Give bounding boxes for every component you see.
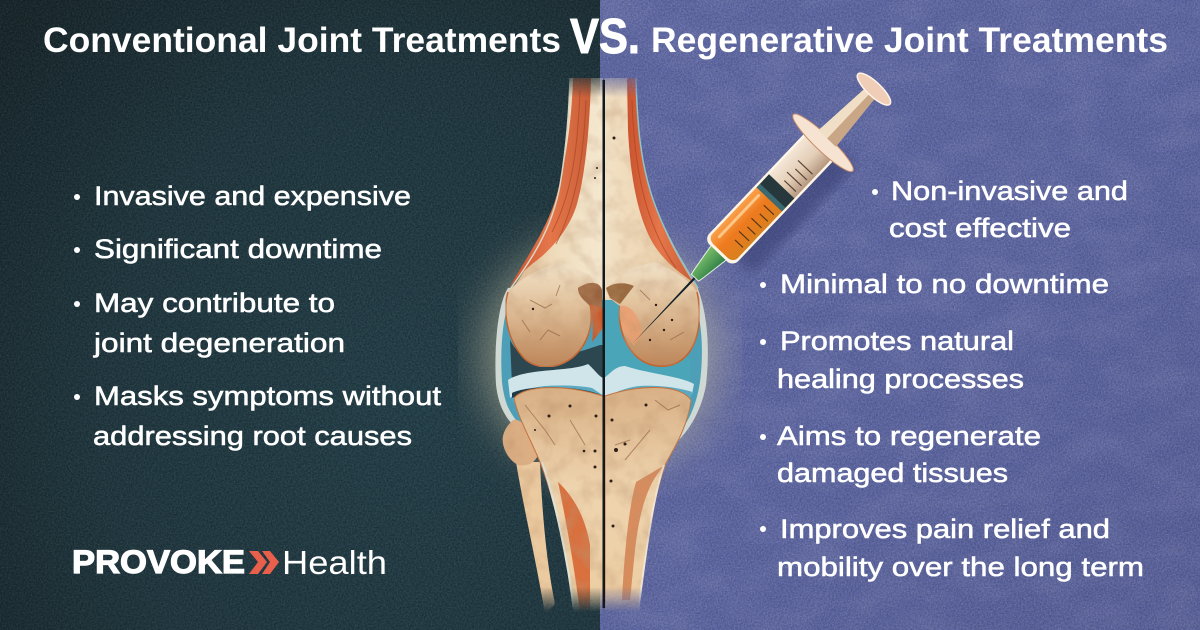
- list: conventional drawbacks: joint degeneration: [93, 328, 345, 358]
- icon: double chevron: [249, 551, 279, 574]
- femur shaft: [508, 78, 700, 300]
- list: regenerative benefits: healing processes: [777, 364, 1024, 394]
- capsule membrane: [495, 282, 708, 446]
- glow behind knee: [482, 237, 718, 473]
- list: regenerative benefits: Minimal to no downtime: [780, 269, 1109, 299]
- liquid: [708, 186, 783, 263]
- list: conventional drawbacks: Masks symptoms without: [94, 381, 442, 411]
- logo: Provoke Health: Health: [282, 544, 387, 581]
- list: regenerative benefits: Promotes natural: [780, 326, 1014, 356]
- list: conventional drawbacks: addressing root causes: [93, 421, 412, 451]
- fibula: [503, 420, 555, 614]
- list: regenerative benefits: [760, 176, 1144, 582]
- list: regenerative benefits: cost effective: [889, 213, 1071, 243]
- heading: versus: VS.: [570, 10, 640, 64]
- centre divider: [602, 80, 605, 608]
- syringe shadow: [725, 140, 856, 275]
- list: regenerative benefits: Aims to regenerate: [777, 421, 1041, 451]
- barrel flange: [788, 109, 858, 177]
- list: conventional drawbacks: Invasive and expensive: [94, 181, 411, 211]
- logo: Provoke Health: [72, 544, 387, 581]
- list: regenerative benefits: damaged tissues: [777, 458, 1008, 488]
- illustration: syringe: [603, 56, 908, 371]
- graduation marks: [728, 160, 812, 247]
- title: [43, 10, 1168, 64]
- muscles: [508, 78, 698, 292]
- femoral condyles: [506, 262, 699, 367]
- tibia: [514, 387, 691, 612]
- plunger rod: [818, 84, 879, 147]
- list: regenerative benefits: Non-invasive and: [891, 176, 1128, 206]
- panel: conventional background: [0, 0, 600, 630]
- logo: Provoke Health: PROVOKE: [72, 544, 245, 580]
- list: conventional drawbacks: [74, 181, 442, 451]
- heading: conventional: Conventional Joint Treatments: [43, 21, 561, 60]
- list: regenerative benefits: Improves pain relief and: [780, 514, 1110, 544]
- illustration: knee joint: [495, 78, 708, 614]
- meniscus: [508, 364, 694, 404]
- heading: regenerative: Regenerative Joint Treatments: [651, 21, 1168, 60]
- panel: regenerative background: [600, 0, 1200, 630]
- barrel: [704, 129, 837, 267]
- list: conventional drawbacks: May contribute to: [94, 288, 335, 318]
- hub: [687, 243, 729, 285]
- list: regenerative benefits: mobility over the long term: [777, 552, 1144, 582]
- needle: [632, 277, 696, 344]
- list: conventional drawbacks: Significant downtime: [94, 234, 382, 264]
- bone pores and cracks: [532, 136, 673, 528]
- plunger thumb rest: [853, 69, 895, 109]
- rubber seal: [757, 174, 794, 211]
